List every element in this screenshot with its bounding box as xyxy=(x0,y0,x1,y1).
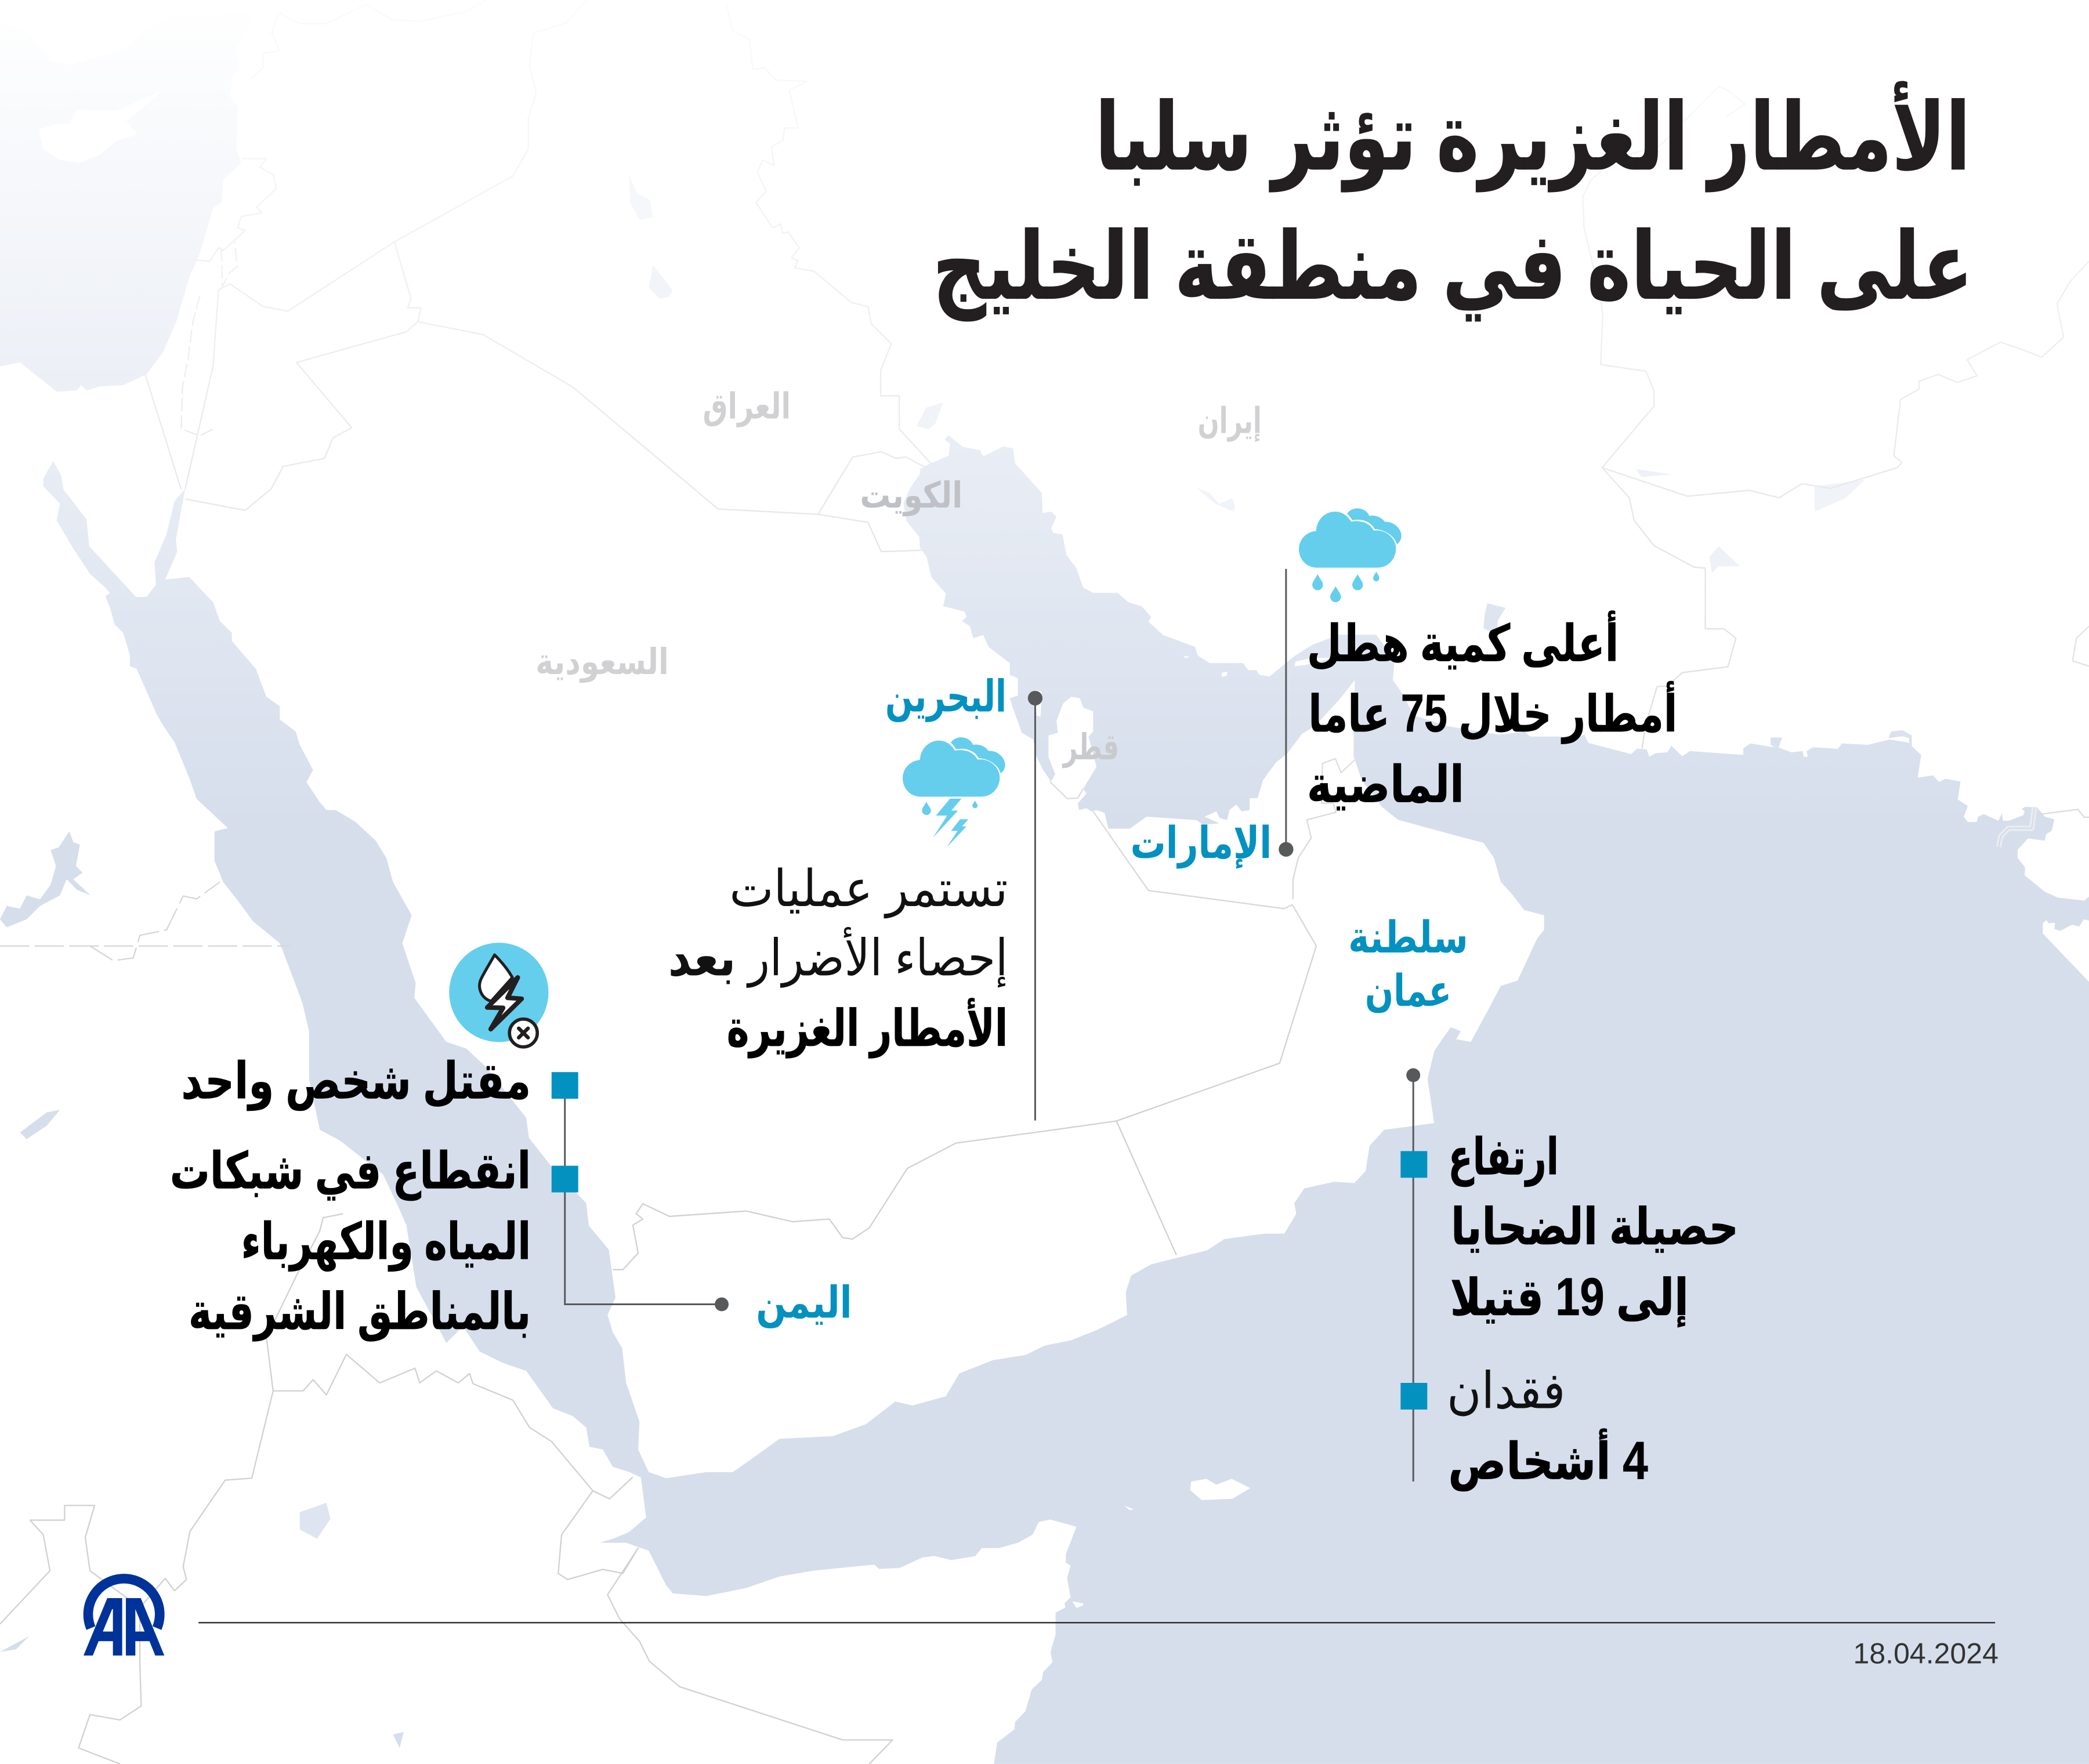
callout: Bahrain xyxy=(668,672,1042,1121)
text: UAE: أعلى كمية هطل xyxy=(1307,610,1619,672)
label: Iran: إيران xyxy=(1198,401,1262,442)
label: UAE: الإمارات xyxy=(1131,818,1272,869)
text: outages: انقطاع في شبكات xyxy=(170,1143,531,1201)
text: missing: فقدان xyxy=(1447,1363,1565,1419)
sea: Red Sea, Persian Gulf, Arabian Sea, Gulf of Aden xyxy=(44,435,2089,1764)
sea: Mediterranean xyxy=(0,8,253,392)
callout: Oman xyxy=(1348,913,1739,1491)
text: Bahrain: تستمر عمليات xyxy=(729,861,1008,918)
label: Iraq: العراق xyxy=(703,386,791,427)
text: outages: بالمناطق الشرقية xyxy=(189,1284,531,1341)
label: Saudi Arabia: السعودية xyxy=(535,642,669,683)
map: lakes xyxy=(0,175,1865,1748)
leader line and dot xyxy=(1406,1068,1420,1482)
callout: UAE xyxy=(1131,508,1677,869)
text: UAE: الماضية xyxy=(1307,757,1464,813)
text: one dead: مقتل شخص واحد xyxy=(181,1053,531,1111)
icon: rain cloud xyxy=(1299,508,1402,602)
label: Yemen: اليمن xyxy=(756,1278,852,1328)
text: outages xyxy=(170,1143,531,1341)
bullet xyxy=(1400,1151,1427,1178)
text: casualties xyxy=(1448,1129,1739,1328)
label: Kuwait: الكويت xyxy=(860,476,962,516)
icon: AA logo xyxy=(84,1578,164,1656)
text: casualties: إلى 19 قتيلا xyxy=(1450,1267,1689,1328)
text: casualties: حصيلة الضحايا xyxy=(1451,1199,1739,1255)
callout: Yemen xyxy=(170,943,852,1341)
country labels xyxy=(535,386,1262,768)
text: Bahrain: الأمطار الغزيرة xyxy=(727,998,1008,1058)
leader line and dot xyxy=(1028,691,1042,1121)
text: Bahrain xyxy=(668,861,1008,1058)
text: missing xyxy=(1447,1363,1648,1491)
label: Oman: عمان xyxy=(1365,966,1451,1016)
leader line and dot xyxy=(1279,569,1293,857)
title xyxy=(933,81,1973,322)
label: Qatar: قطر xyxy=(1062,727,1119,768)
label: Oman xyxy=(1348,913,1468,1016)
leader line and dot xyxy=(565,1086,729,1311)
icon: water and power outage xyxy=(449,943,549,1047)
icon: storm cloud xyxy=(903,737,1005,847)
bullet xyxy=(1400,1383,1427,1410)
label: Oman: سلطنة xyxy=(1348,913,1468,962)
text: casualties: ارتفاع xyxy=(1448,1129,1559,1187)
label: Bahrain: البحرين xyxy=(885,672,1007,723)
text: missing: 4 أشخاص xyxy=(1448,1428,1648,1491)
date: 18.04.2024 xyxy=(1853,1637,1999,1669)
text: UAE xyxy=(1307,610,1677,813)
text: outages: المياه والكهرباء xyxy=(241,1214,531,1272)
text: UAE: أمطار خلال 75 عاما xyxy=(1308,681,1677,744)
bullet xyxy=(552,1166,578,1193)
footer rule xyxy=(198,1622,1995,1623)
text: Bahrain: إحصاء الأضرار بعد xyxy=(668,927,1008,988)
bullet xyxy=(552,1072,578,1099)
